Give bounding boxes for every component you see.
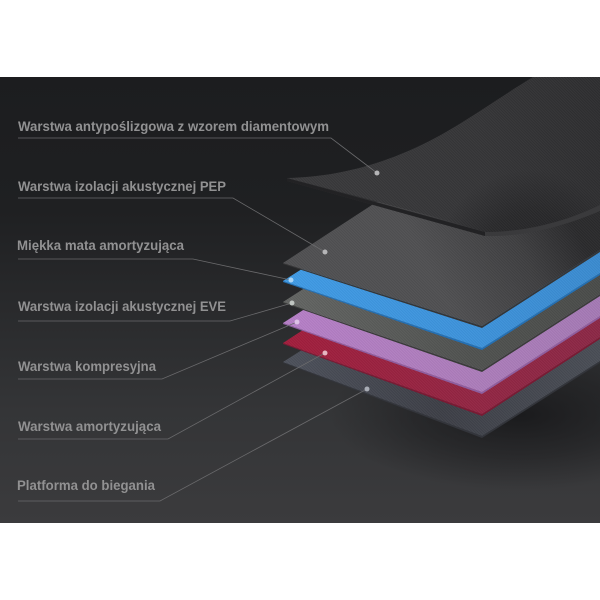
infographic xyxy=(0,77,600,523)
label: cushioning layer: Warstwa amortyzująca xyxy=(18,419,161,434)
label: running platform xyxy=(17,386,370,501)
label: PEP layer: Warstwa izolacji akustycznej PEP xyxy=(18,179,226,194)
label: compression layer xyxy=(18,320,300,379)
layer: EVE acoustic grey xyxy=(283,226,600,372)
layer: anti-slip top sheet xyxy=(287,77,600,236)
label: soft mat xyxy=(17,238,294,282)
layer: compression purple xyxy=(283,247,600,394)
label: anti-slip layer: Warstwa antypoślizgowa z wzorem diamentowym xyxy=(18,119,329,134)
background panel xyxy=(0,77,600,523)
layer: PEP acoustic grey xyxy=(283,186,600,328)
label: EVE layer: Warstwa izolacji akustycznej EVE xyxy=(18,299,226,314)
layer: running platform xyxy=(283,286,600,438)
label: cushioning layer xyxy=(18,350,328,439)
label: anti-slip layer xyxy=(18,119,380,176)
label: PEP layer xyxy=(18,179,328,254)
layer: cushioning red xyxy=(283,266,600,416)
stack shadow xyxy=(385,373,600,470)
layer: soft mat blue xyxy=(283,206,600,350)
label: running platform: Platforma do biegania xyxy=(17,478,155,493)
label: EVE layer xyxy=(18,299,294,321)
label: soft mat: Miękka mata amortyzująca xyxy=(17,238,184,253)
label: compression layer: Warstwa kompresyjna xyxy=(18,359,156,374)
